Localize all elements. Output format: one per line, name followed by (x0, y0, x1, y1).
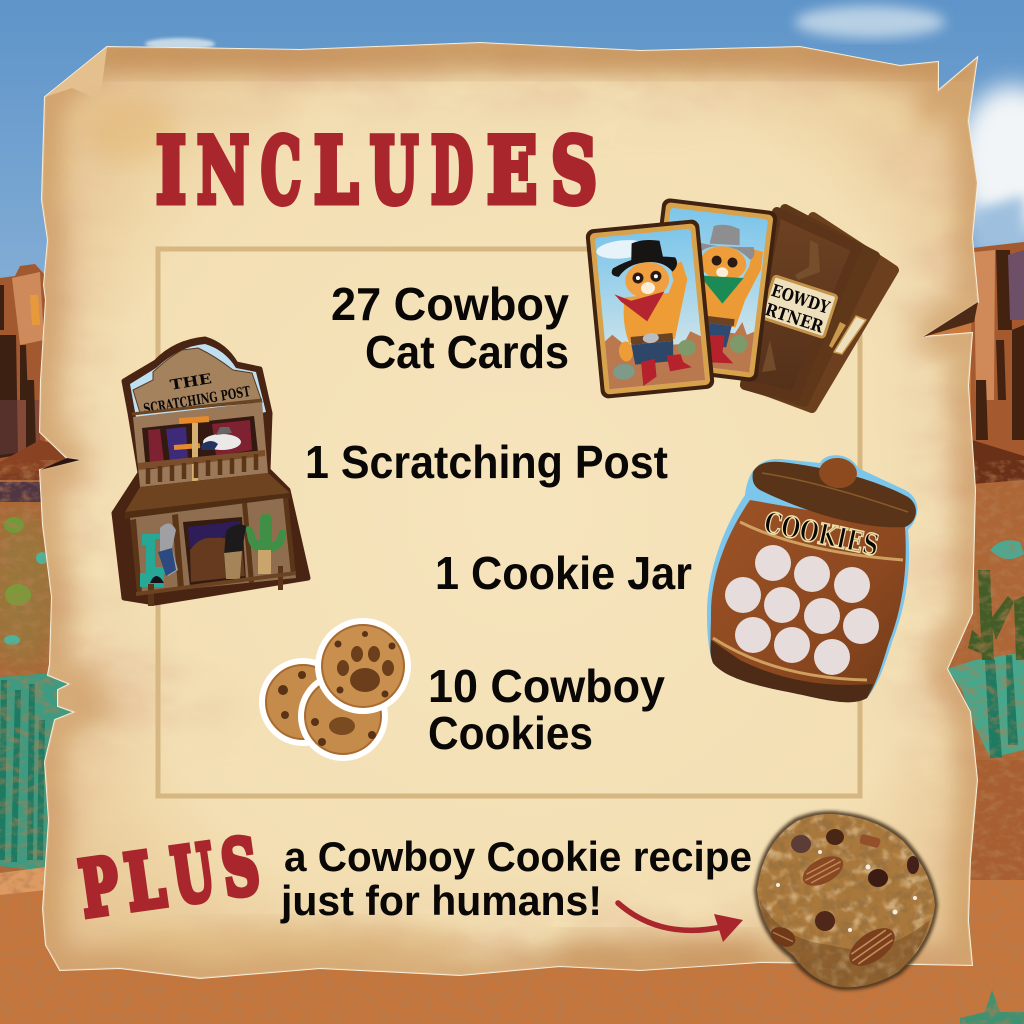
icon: brown card backs fan: RTNER (762, 300, 826, 338)
title: E (487, 118, 537, 224)
background: sky (0, 0, 1024, 300)
title: N (197, 118, 249, 224)
text: 10 Cowboy Cookies: 10 Cowboy (428, 660, 665, 712)
title: U (370, 118, 418, 224)
title: S (551, 118, 597, 224)
text: recipe line: just for humans! (280, 877, 602, 924)
text: 10 Cowboy Cookies: Cookies (428, 707, 593, 759)
icon: left game cookie (259, 658, 347, 746)
text: recipe line: a Cowboy Cookie recipe (284, 833, 752, 880)
heading: PLUS (75, 821, 264, 934)
text: 10 Cowboy Cookies (428, 660, 665, 759)
text: 27 Cowboy Cat Cards (331, 278, 569, 378)
icon: brown card backs fan: EOWDY (769, 281, 833, 319)
icon: scratching post saloon: SCRATCHING POST (142, 384, 252, 418)
title (156, 118, 597, 224)
text: 1 Cookie Jar: 1 Cookie Jar (435, 547, 692, 599)
background: right canyon (970, 242, 1024, 484)
title: D (431, 118, 473, 224)
arrow (618, 903, 743, 942)
background: desert ground (0, 462, 1024, 1024)
icon: front cat card with black hat (585, 219, 715, 399)
icon: top game cookie with paw print (315, 618, 411, 714)
title: C (261, 118, 301, 224)
heading: PLUS: P (75, 841, 125, 934)
icon: real cowboy cookie photo (750, 805, 945, 995)
heading: PLUS: S (216, 821, 264, 914)
text: recipe line (280, 833, 752, 924)
icon: brown card backs fan (745, 209, 894, 408)
text: 27 Cowboy Cat Cards: 27 Cowboy (331, 278, 569, 330)
background: ground texture (0, 460, 1024, 1024)
background: left canyon (0, 264, 68, 475)
text: 27 Cowboy Cat Cards: Cat Cards (365, 326, 569, 378)
title: L (314, 118, 358, 224)
heading: PLUS: U (167, 827, 220, 921)
background: left vegetation (0, 517, 72, 895)
icon: scratching post saloon (114, 339, 308, 606)
icon: cookie jar: COOKIES (761, 505, 882, 563)
inner frame (158, 249, 860, 796)
icon: back cat card with green bandana (642, 198, 778, 382)
icon: middle game cookie (298, 671, 388, 761)
heading: PLUS: L (120, 834, 170, 928)
background: right vegetation (947, 540, 1024, 1024)
title: I (156, 118, 186, 224)
text: 1 Scratching Post: 1 Scratching Post (305, 436, 668, 488)
icon: cookie jar (707, 455, 917, 702)
icon: scratching post saloon: THE (169, 371, 213, 394)
